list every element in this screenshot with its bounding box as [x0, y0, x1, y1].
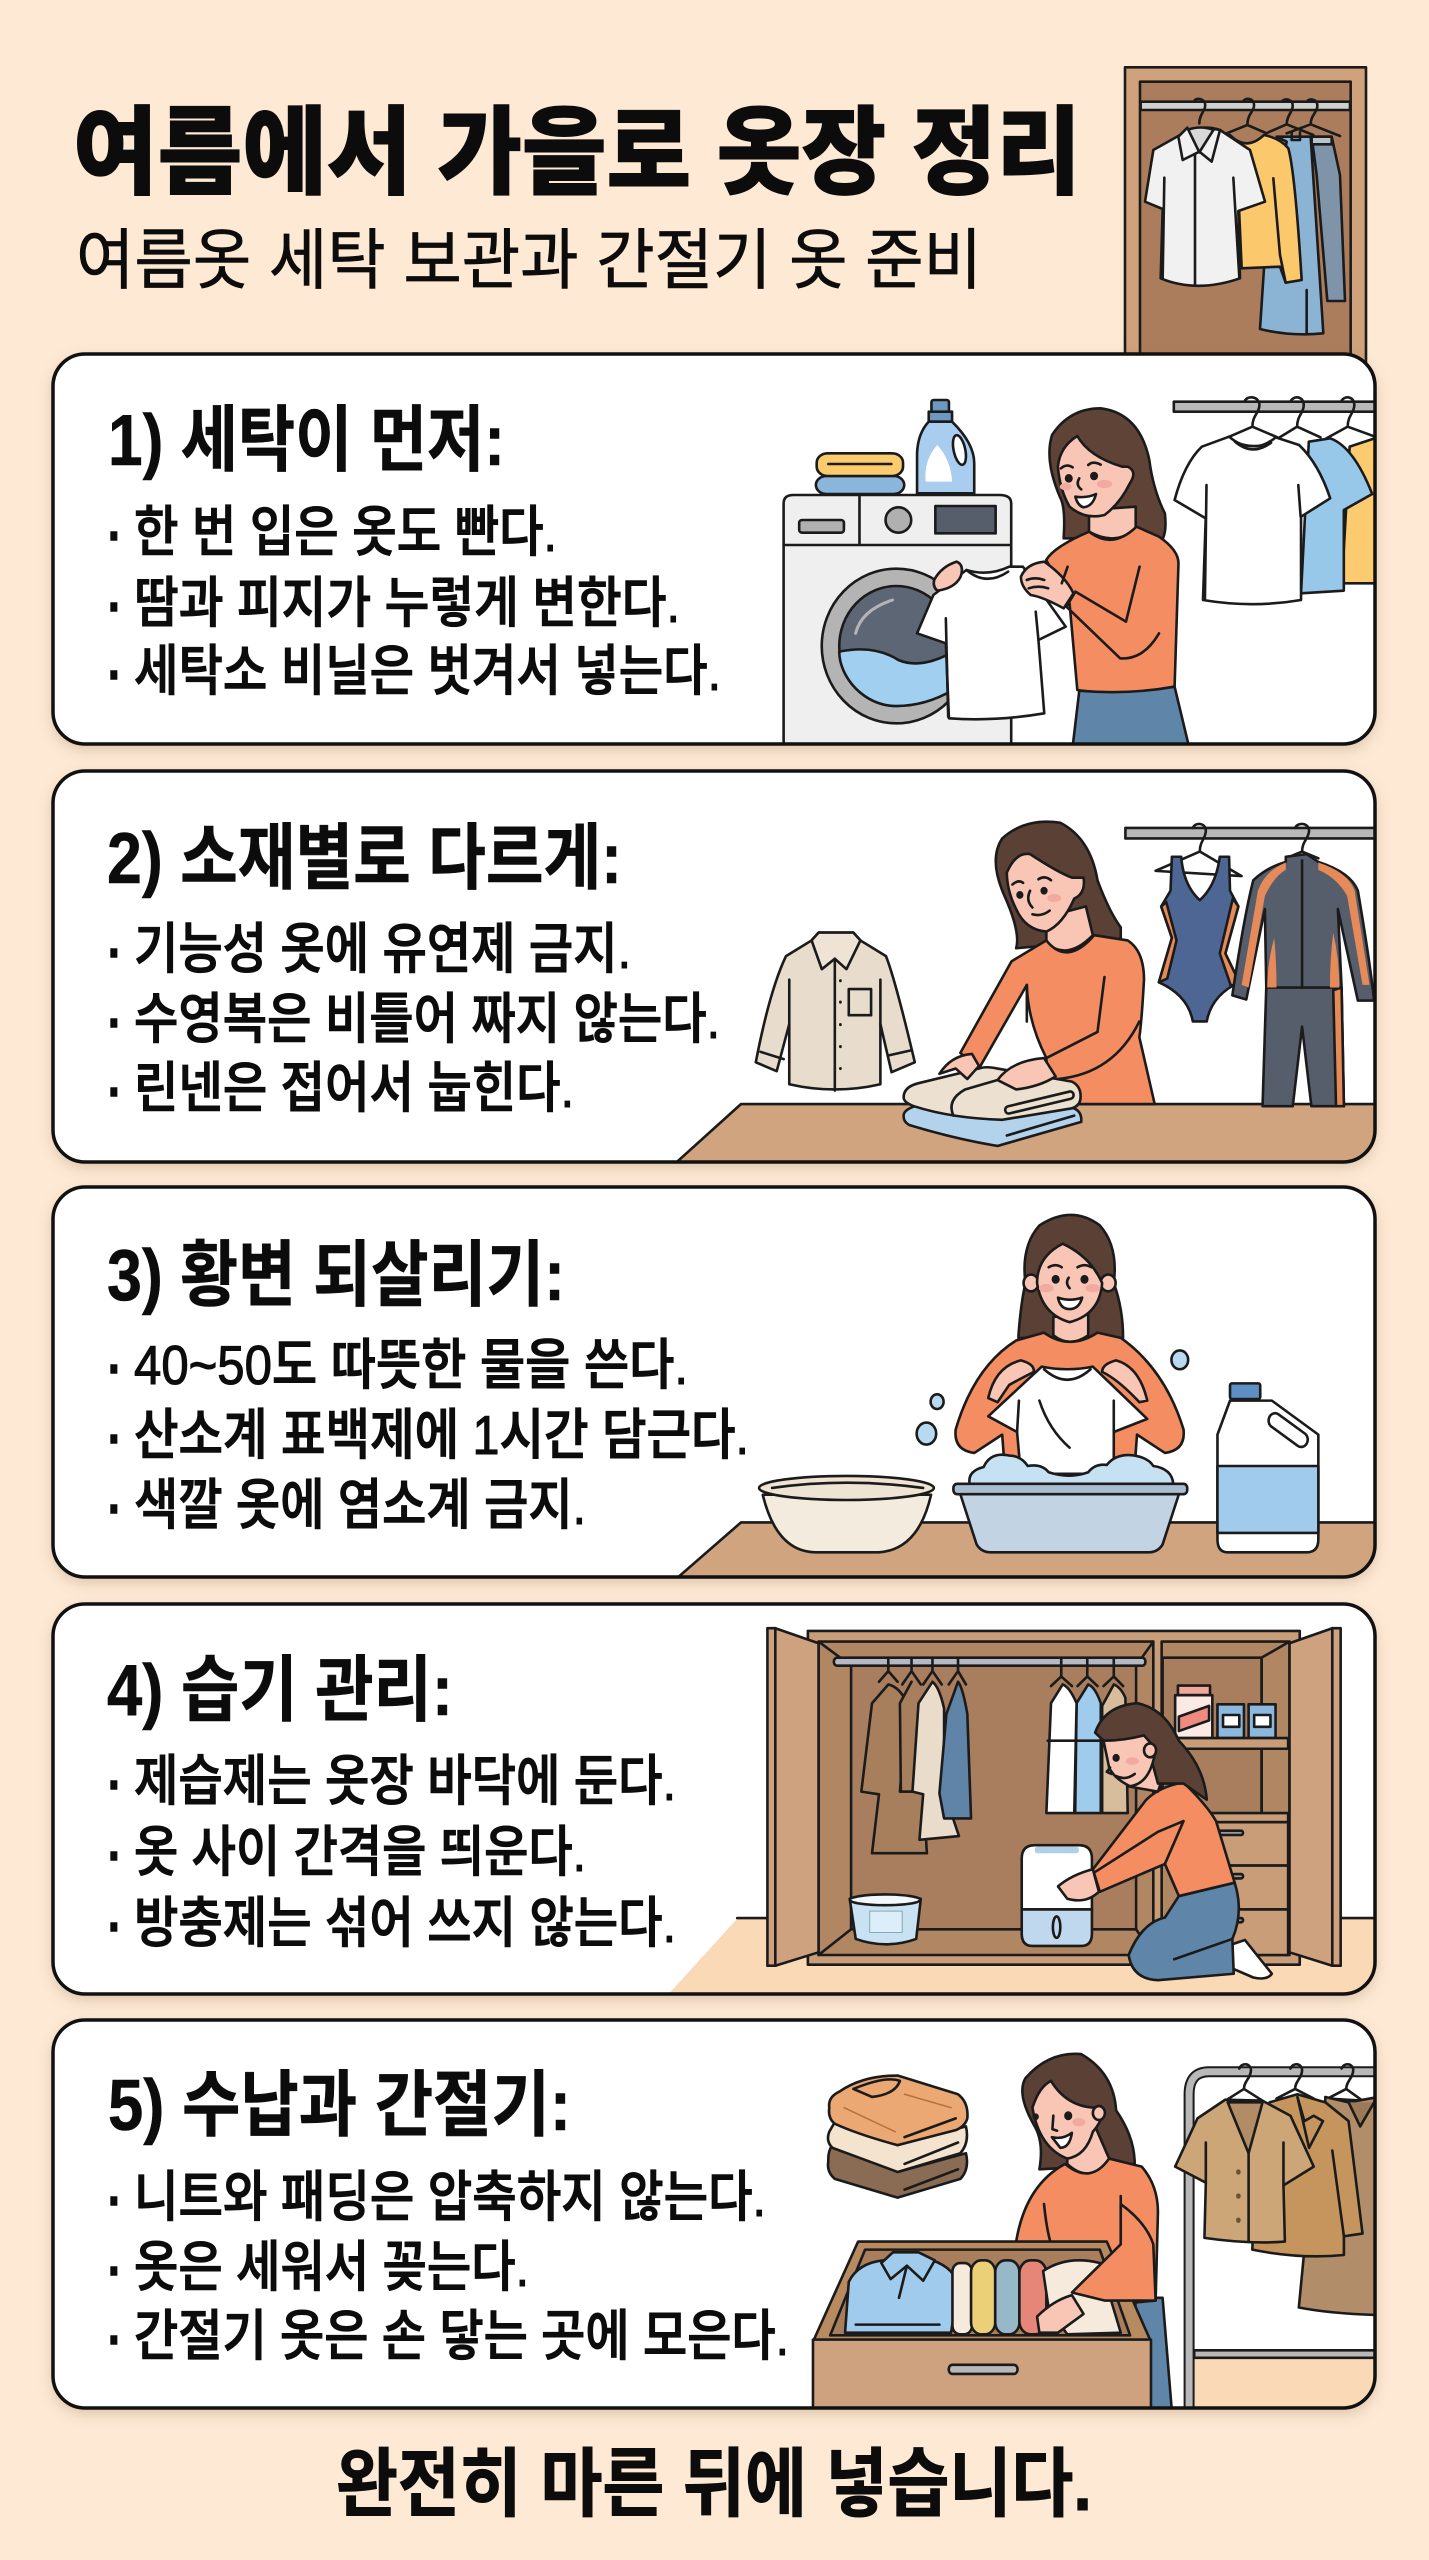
bullet list: · — [108, 1755, 122, 1815]
card outline — [53, 771, 1375, 1162]
bullet list: · — [108, 2171, 122, 2231]
illustration: woman placing dehumidifier in wardrobe — [665, 1628, 1379, 1998]
bullet list: 산소계 표백제에 1시간 담근다. — [134, 1404, 749, 1466]
panel: 5 storage and between seasons — [53, 2020, 1380, 2411]
bullet list: · — [108, 2310, 122, 2370]
illustration: woman folding linen with swimwear — [675, 822, 1379, 1164]
heading: 4) 습기 관리: — [107, 1651, 453, 1731]
bullet list: 옷은 세워서 꽂는다. — [134, 2236, 529, 2298]
subtitle: 여름옷 세탁 보관과 간절기 옷 준비 — [76, 223, 982, 297]
bullet list: · — [108, 1479, 122, 1539]
illustration: woman with drawer and coat rack — [813, 2054, 1380, 2411]
bullet list: · — [108, 1409, 122, 1469]
bullet list: · — [108, 577, 122, 637]
card background — [53, 2020, 1375, 2408]
icon: wardrobe with hanging clothes — [1125, 67, 1366, 365]
panel: 3 yellowing rescue — [53, 1187, 1379, 1580]
bullet list: 옷 사이 간격을 띄운다. — [134, 1821, 586, 1883]
bullet list: · — [108, 1897, 122, 1957]
card outline — [53, 2020, 1375, 2408]
bullet list: 40~50도 따뜻한 물을 쓴다. — [134, 1334, 688, 1396]
panel: 2 by material — [53, 771, 1379, 1164]
bullet list: · — [108, 2241, 122, 2301]
heading: 3) 황변 되살리기: — [107, 1236, 565, 1316]
title: 여름에서 가을로 옷장 정리 — [73, 100, 1081, 207]
bullet list — [108, 918, 720, 1122]
bullet list: 니트와 패딩은 압축하지 않는다. — [134, 2166, 766, 2228]
bullet list: 기능성 옷에 유연제 금지. — [134, 918, 631, 980]
bullet list: 방충제는 섞어 쓰지 않는다. — [134, 1892, 676, 1954]
card background — [53, 354, 1375, 744]
bullet list — [108, 1334, 749, 1539]
card background — [53, 1604, 1375, 1994]
bullet list — [108, 1750, 676, 1957]
bullet list: · — [108, 1339, 122, 1399]
heading: 2) 소재별로 다르게: — [107, 819, 622, 899]
bullet list — [108, 501, 721, 705]
card background — [53, 771, 1375, 1162]
card outline — [53, 1604, 1375, 1994]
heading: 1) 세탁이 먼저: — [108, 401, 505, 481]
bullet list: 수영복은 비틀어 짜지 않는다. — [134, 988, 720, 1050]
card outline — [53, 354, 1375, 744]
bullet list: · — [108, 923, 122, 983]
bullet list: 세탁소 비닐은 벗겨서 넣는다. — [134, 640, 721, 702]
card background — [53, 1187, 1375, 1577]
bullet list: 린넨은 접어서 눕힌다. — [134, 1057, 574, 1119]
footer message: 완전히 마른 뒤에 넣습니다. — [336, 2442, 1092, 2526]
bullet list: 땀과 피지가 누렇게 변한다. — [134, 572, 680, 634]
bullet list: · — [108, 1062, 122, 1122]
bullet list: 제습제는 옷장 바닥에 둔다. — [134, 1750, 676, 1812]
bullet list: · — [108, 1826, 122, 1886]
illustration: woman at washing machine — [784, 397, 1385, 747]
panel: 1 washing first — [53, 354, 1385, 747]
bullet list: 색깔 옷에 염소계 금지. — [134, 1474, 586, 1536]
card outline — [53, 1187, 1375, 1577]
panel: 4 humidity control — [53, 1604, 1379, 1998]
bullet list: · — [108, 645, 122, 705]
bullet list: 간절기 옷은 손 닿는 곳에 모은다. — [134, 2305, 789, 2367]
heading: 5) 수납과 간절기: — [108, 2066, 571, 2146]
bullet list: · — [108, 506, 122, 566]
bullet list — [108, 2166, 789, 2370]
illustration: woman soaking shirt in tub — [675, 1215, 1379, 1580]
bullet list: · — [108, 993, 122, 1053]
bullet list: 한 번 입은 옷도 빤다. — [134, 501, 557, 563]
